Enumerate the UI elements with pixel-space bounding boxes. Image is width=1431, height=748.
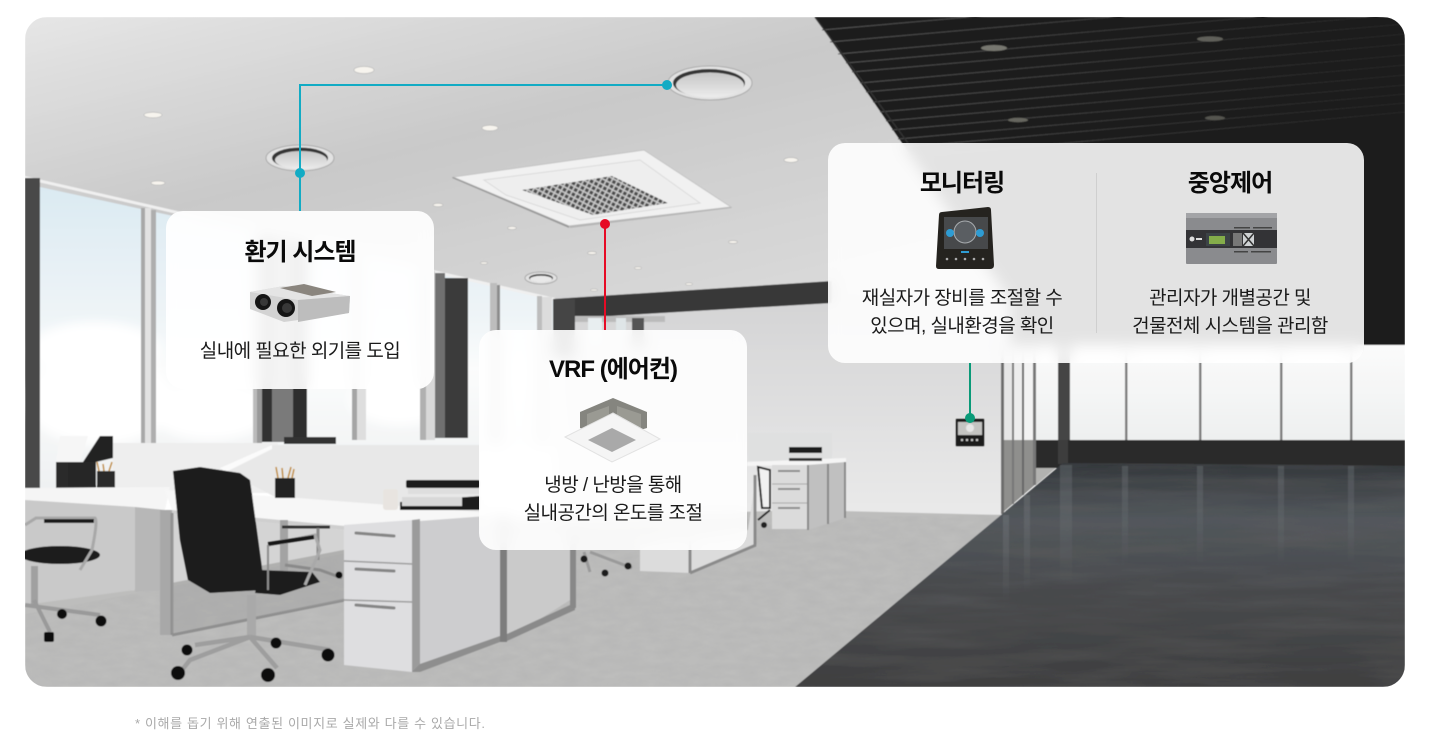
description: monitoring: 있으며, 실내환경을 확인 (870, 316, 1054, 337)
description: VRF: 냉방 / 난방을 통해 (544, 475, 682, 496)
ceiling cassette air conditioner (452, 150, 732, 228)
concrete floor (25, 510, 1001, 687)
panel: monitoring and central control (828, 143, 1364, 363)
left chair (20, 518, 106, 642)
left dark column (25, 178, 40, 498)
description: VRF (524, 475, 702, 524)
right windows (1036, 345, 1405, 468)
VRF connector line (600, 219, 610, 330)
office chair (171, 467, 334, 682)
dark floor (795, 463, 1405, 687)
description: monitoring (862, 288, 1062, 337)
mid desk behind card (580, 475, 756, 576)
monitoring connector line (965, 363, 975, 423)
left window sky (40, 187, 560, 490)
heading: central control: 중앙제어 (1188, 170, 1272, 197)
air diffuser left (266, 145, 334, 171)
far right desk (747, 446, 846, 530)
drawer pedestal (344, 515, 576, 672)
dark beam and back column (553, 281, 832, 359)
description: central control (1132, 288, 1328, 337)
dark floor grain (795, 463, 1405, 687)
concrete texture (105, 620, 324, 678)
description: monitoring: 재실자가 장비를 조절할 수 (862, 288, 1062, 309)
left desk (25, 487, 170, 605)
window mullions (141, 208, 552, 448)
back office wall (555, 295, 1005, 520)
panel: ventilation system (166, 211, 434, 389)
heading: ventilation system: 환기 시스템 (244, 239, 356, 266)
divider (1096, 173, 1097, 333)
wall thermostat (955, 418, 985, 447)
description: ventilation: 실내에 필요한 외기를 도입 (200, 341, 400, 362)
heading: monitoring: 모니터링 (920, 170, 1004, 197)
dark slatted ceiling (815, 17, 1405, 347)
footnote: * 이해를 돕기 위해 연출된 이미지로 실제와 다를 수 있습니다. (135, 716, 486, 731)
white ceiling (25, 17, 903, 298)
ceiling lamps dark (981, 36, 1225, 122)
ceiling spot lights (144, 66, 798, 291)
icon: wall controller (936, 207, 994, 269)
air diffuser top right (668, 66, 752, 100)
ceiling edge highlight (25, 176, 555, 301)
back chair under desk (282, 527, 342, 578)
pencil cup (275, 467, 295, 498)
icon: cassette unit (564, 398, 661, 462)
icon: ventilator unit (250, 284, 350, 322)
glass partition (1000, 360, 1056, 515)
air diffuser small (525, 272, 557, 284)
clouds (25, 323, 420, 442)
magazine holders and pens (56, 436, 115, 488)
floor reflections (1003, 464, 1354, 566)
back partitions (113, 437, 480, 515)
ceiling slats (822, 17, 1384, 143)
description: VRF: 실내공간의 온도를 조절 (524, 503, 702, 524)
panel: VRF air conditioner (479, 330, 747, 550)
description: central control: 관리자가 개별공간 및 (1149, 288, 1311, 309)
white ceiling edge trim (815, 17, 908, 143)
mug and trays (383, 480, 480, 510)
description: central control: 건물전체 시스템을 관리함 (1132, 316, 1328, 337)
icon: central controller (1186, 213, 1277, 264)
ventilation connector line (295, 80, 672, 211)
main desk (160, 490, 500, 635)
heading: VRF: VRF (에어컨) (549, 356, 677, 383)
